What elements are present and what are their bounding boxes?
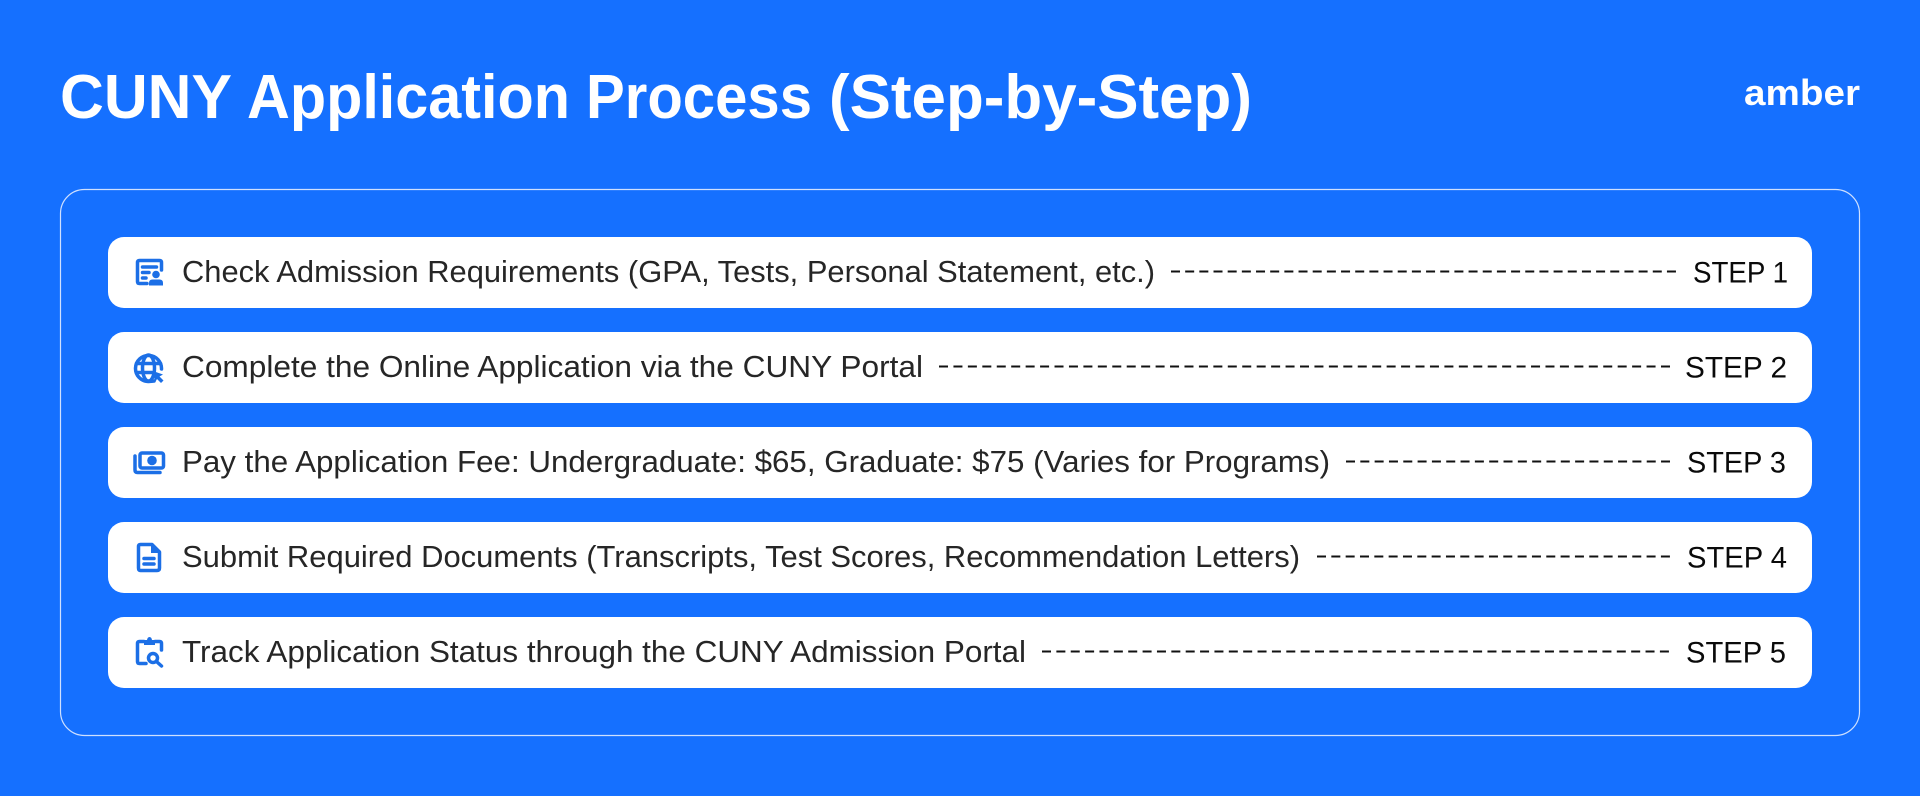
step 2 row (108, 332, 1812, 403)
step 3 row (108, 427, 1812, 498)
step 4 connector (1317, 556, 1670, 558)
step 2 label: STEP 2 (1685, 352, 1787, 384)
step 2 connector (939, 366, 1670, 368)
step 1 label: STEP 1 (1693, 256, 1788, 290)
step 5 label: STEP 5 (1686, 636, 1786, 670)
icon: globe with cursor (136, 355, 164, 383)
icon: document (138, 544, 160, 570)
step 4 label: STEP 4 (1687, 542, 1787, 574)
step 3 label: STEP 3 (1687, 446, 1786, 480)
title: (Step-by-Step) (829, 63, 1252, 132)
icon: clipboard with magnifier (138, 637, 162, 666)
title (60, 63, 1252, 132)
logo: amber: amber (1744, 72, 1860, 113)
panel: steps container (60, 190, 1860, 736)
title: Application (247, 63, 570, 132)
step 5 row (108, 617, 1812, 688)
step 5 connector (1042, 650, 1669, 652)
step 2 text: Complete the Online Application via the CUNY Portal (182, 350, 923, 384)
step 5 text: Track Application Status through the CUNY Admission Portal (182, 635, 1026, 669)
step 4 text: Submit Required Documents (Transcripts, Test Scores, Recommendation Letters) (182, 540, 1300, 574)
icon: banknotes (135, 453, 164, 472)
step 1 row (108, 237, 1812, 308)
step 4 row (108, 522, 1812, 593)
step 1 text: Check Admission Requirements (GPA, Tests, Personal Statement, etc.) (182, 255, 1155, 289)
step 3 text: Pay the Application Fee: Undergraduate: $65, Graduate: $75 (Varies for Programs) (182, 445, 1330, 479)
title: Process (586, 63, 812, 132)
step 1 connector (1171, 270, 1676, 272)
step 3 connector (1346, 460, 1670, 462)
icon: profile document (138, 260, 163, 286)
title: CUNY (60, 63, 232, 132)
